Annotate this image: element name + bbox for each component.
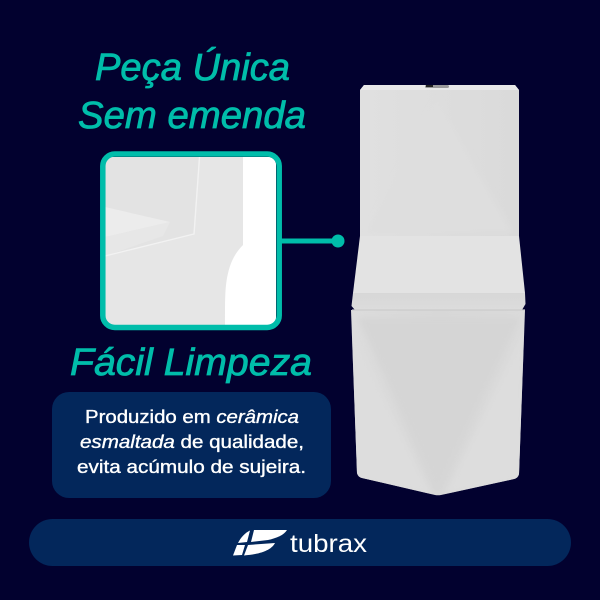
description text: esmaltada de qualidade, [80,432,304,452]
toilet bowl [351,310,525,495]
heading: Fácil Limpeza: Fácil Limpeza [70,342,312,384]
detail inset: close-up of the seamless join [103,154,279,328]
connector line with dot [281,234,344,248]
title: Peça Única Sem emenda [78,46,306,137]
toilet seat lid [352,236,526,310]
description text [77,407,306,477]
product: one-piece toilet, front view [351,85,526,495]
description panel [52,392,331,498]
title: Peça Única Sem emenda: Sem emenda [78,95,306,137]
icon: tubrax logo [233,530,287,556]
brand name: tubrax [290,530,368,558]
toilet tank [360,85,519,236]
description text: Produzido em cerâmica [85,407,299,427]
title: Peça Única Sem emenda: Peça Única [95,46,290,89]
brand bar [29,519,571,566]
description text: evita acúmulo de sujeira. [77,457,306,477]
